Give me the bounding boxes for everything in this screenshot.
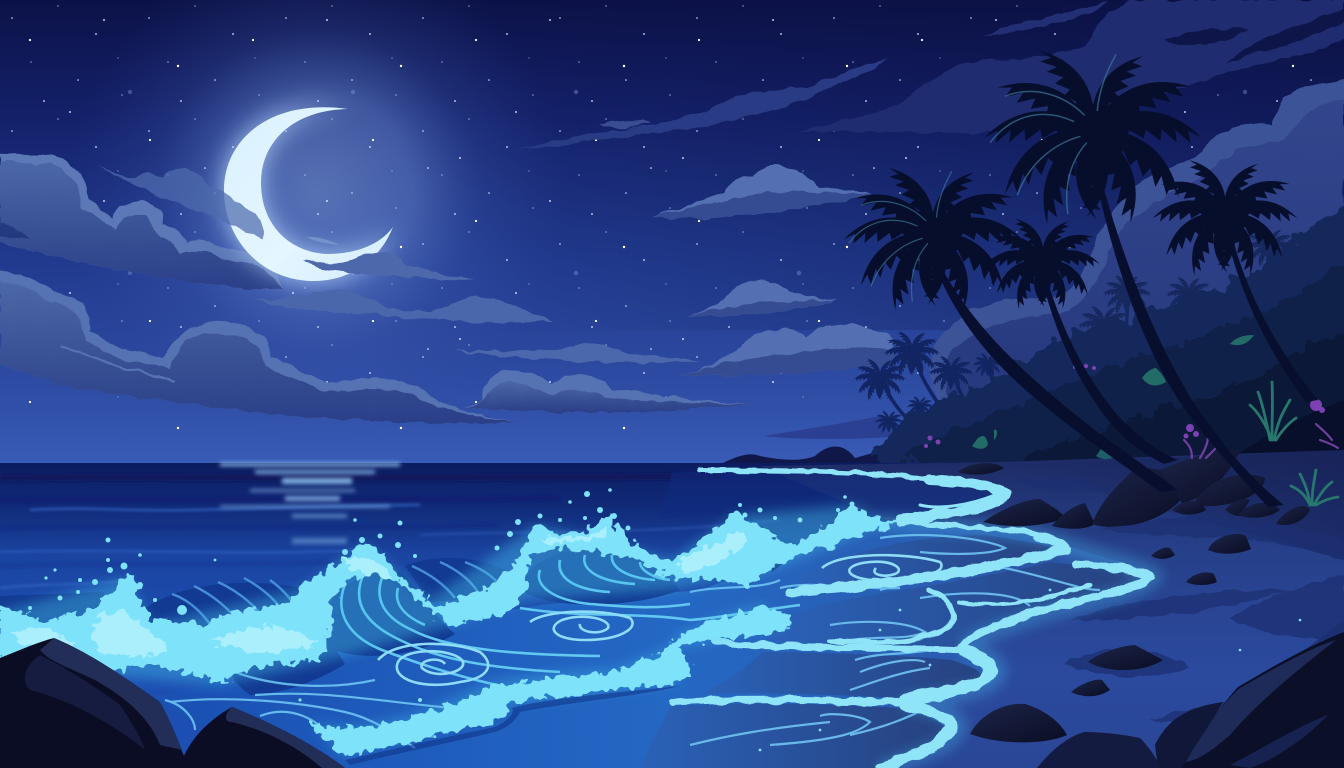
- small distant palms: [853, 328, 1004, 438]
- shallow water sheet: [150, 522, 1155, 768]
- swirl patterns in the water: [378, 555, 942, 685]
- star field: [0, 0, 1344, 440]
- jungle treeline: [873, 205, 1344, 540]
- glowing shoreline foam: [672, 470, 1155, 768]
- palm crown: middle small: [986, 212, 1100, 310]
- rock: bottom left second boulder: [180, 707, 345, 768]
- shallow lobes darker water: [640, 535, 1142, 768]
- cloud: long strip under moon: [254, 289, 552, 322]
- palm crown: left large: [844, 158, 1022, 312]
- cloud: horizon bank centre: [464, 370, 750, 412]
- rock: bottom left boulder: [0, 638, 190, 768]
- foreground water flow lines: [165, 535, 1100, 748]
- wave curl lines: [172, 562, 497, 632]
- palms inside jungle canopy: [1077, 225, 1295, 366]
- cloud: faint horizon wisp: [764, 416, 900, 439]
- cloud: wisp over moon: [98, 165, 264, 240]
- high wispy clouds right: [520, 0, 1344, 149]
- far bay water darker tone: [660, 471, 1000, 520]
- foam spray droplets: [28, 488, 1301, 751]
- cloud: small wisp inside moon curve: [306, 237, 340, 245]
- distant sea bands: [0, 476, 780, 588]
- foreground plants and flowers: [924, 335, 1338, 505]
- cloud: strip below moon: [304, 253, 475, 280]
- beach shadow patches: [1010, 478, 1344, 721]
- rock: bottom right boulders: [1037, 632, 1344, 768]
- cloud: large lower left bank: [0, 272, 518, 423]
- cloud: upper left bank: [0, 152, 282, 290]
- foam on breaking wave: [0, 505, 892, 685]
- dark wave troughs and curls: [0, 533, 798, 695]
- sea surface: [0, 463, 1344, 768]
- distant headland: [712, 440, 1000, 468]
- rock: beach stones: [958, 450, 1310, 742]
- sand beach: [760, 450, 1344, 768]
- night sky background: [0, 0, 1344, 470]
- cloud: small centre upper: [652, 165, 872, 218]
- palm crown: right: [1152, 152, 1298, 277]
- crescent moon: [224, 107, 393, 281]
- moon reflection on water: [220, 463, 400, 544]
- cloud: tall right bank behind palms: [930, 80, 1344, 430]
- cloud: thin centre strip: [452, 343, 700, 363]
- moon glow halo: [68, 0, 568, 440]
- palm trunks: [926, 130, 1318, 507]
- palm crown: tall centre: [984, 39, 1202, 226]
- foam front near shore: [312, 604, 789, 765]
- cloud: centre low: [680, 324, 895, 375]
- cloud: small centre middle: [686, 280, 838, 316]
